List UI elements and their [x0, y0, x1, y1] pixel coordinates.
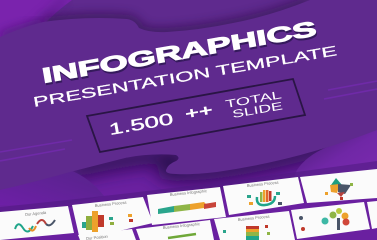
slide: business process hand chart: Business Process: [247, 180, 279, 188]
slide: our agenda: [0, 206, 74, 240]
slide: right edge: [367, 201, 377, 229]
decorative stripes right: [324, 81, 377, 99]
slide: business infographic lower: Business Infographic: [163, 221, 200, 230]
slide band shade: [0, 161, 377, 215]
total label: TOTAL: [224, 89, 283, 111]
lower base: [0, 150, 377, 240]
slide: stacked layers: [214, 211, 295, 240]
top edge shadow: [44, 0, 310, 32]
slide: diamond diagram: [300, 169, 377, 203]
slide: our agenda: Our Agenda: [25, 210, 47, 217]
lower left wave: [0, 170, 104, 205]
lower right wave: [295, 128, 377, 180]
main panel: [0, 0, 377, 190]
slide: business process hand chart: [223, 177, 304, 215]
slide: business infographic arrows: [147, 187, 226, 225]
left strip shadow: [0, 23, 44, 37]
title: INFOGRAPHICS: [40, 17, 318, 88]
subtitle: PRESENTATION TEMPLATE: [32, 42, 338, 110]
slide: stacked layers: Business Process: [238, 214, 270, 222]
slide: business infographic arrows: Business Infographic: [170, 188, 207, 197]
slide count box: [87, 79, 305, 152]
slide: business process bars: [72, 197, 153, 240]
title: [40, 17, 319, 90]
slide: tree diagram: [291, 202, 370, 239]
slide: our position: [78, 229, 136, 240]
top wave shape: [40, 0, 377, 40]
slide: business infographic lower: [136, 220, 214, 240]
slide: business process bars: Business Process: [95, 200, 127, 208]
lower dark wave shadow: [70, 130, 377, 174]
plus signs: ++: [184, 102, 214, 123]
slide count number: 1.500: [108, 111, 175, 139]
lobe shadow: [30, 0, 66, 30]
decorative stripes left: [0, 140, 72, 161]
slide label: SLIDE: [231, 100, 284, 121]
title: INFOGRAPHICS: [41, 19, 319, 90]
top left bright corner: [0, 0, 74, 40]
